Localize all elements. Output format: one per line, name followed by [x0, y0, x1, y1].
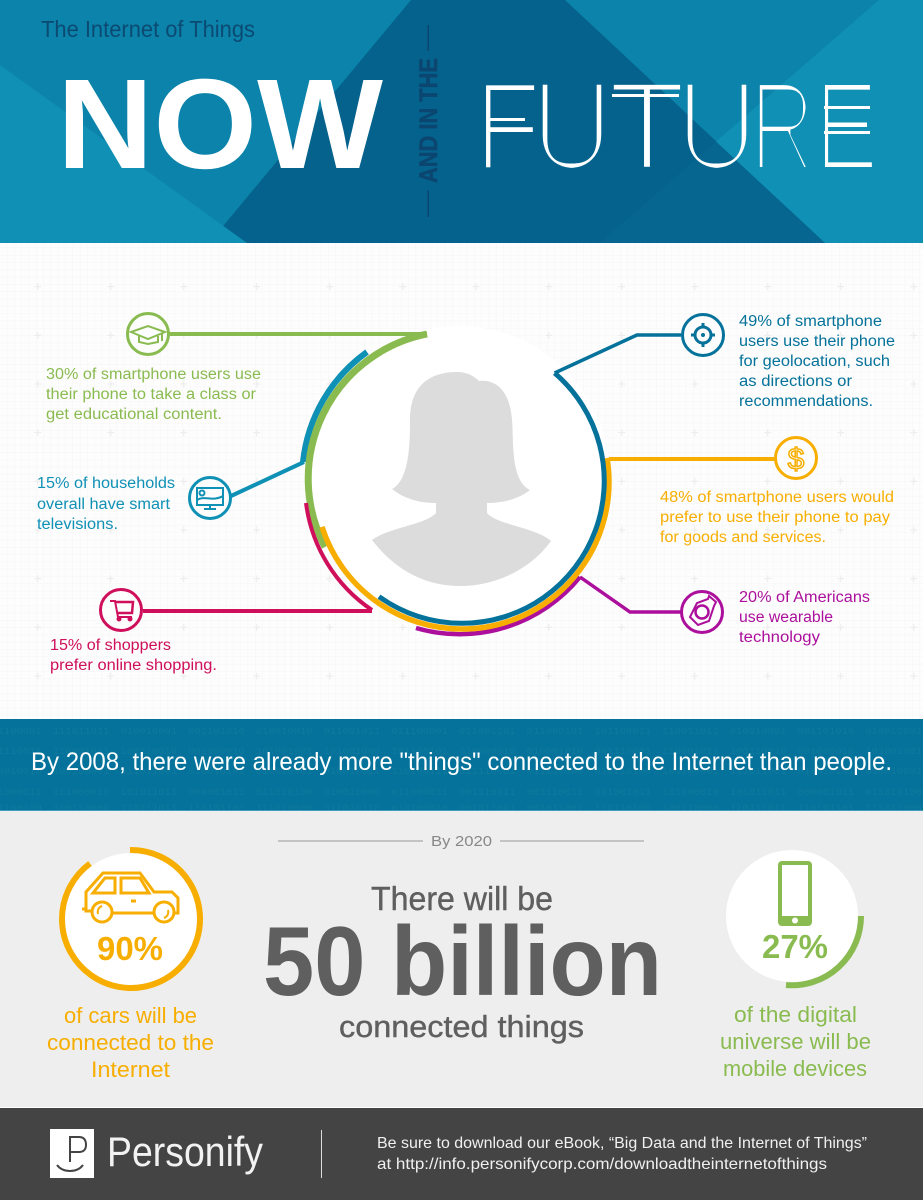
- binary pattern: 111110011 110001011 100110010 001000010 101001001 101001000 101100101 010000010 010001010 001110001 110001011 100110010 001000010 101001001: [0, 746, 922, 758]
- text: mobile devices: [720, 1002, 871, 1081]
- headline: 50 billion: [263, 880, 662, 1044]
- icon: phone: [778, 861, 812, 926]
- text: mobile devices: of the digital: [734, 1002, 857, 1027]
- text: smart television stat: [37, 475, 175, 533]
- text: cars: connected to the: [47, 1030, 214, 1055]
- headline: 50 billion: 50 billion: [263, 906, 662, 1016]
- call to action: [377, 1135, 867, 1173]
- text: geolocation stat: [739, 313, 895, 410]
- text: geolocation stat: as directions or: [739, 373, 852, 390]
- text: cars: [47, 1003, 214, 1082]
- heading: FUTURE: U: [531, 56, 613, 197]
- text: wearable stat: use wearable: [739, 609, 833, 626]
- text: geolocation stat: for geolocation, such: [739, 353, 890, 370]
- icon: graduation cap: [128, 314, 168, 354]
- panel: header: [0, 0, 923, 243]
- panel: 2008 banner: [0, 719, 923, 815]
- text: smart television stat: overall have smart: [37, 496, 171, 513]
- value: 27 percent: 27%: [762, 928, 828, 965]
- text: payments stat: [660, 489, 894, 546]
- text: online shopping stat: prefer online shopping.: [50, 657, 217, 674]
- binary pattern: 100010010 100100001 111011001 010010101 010010001 010010011 110100111 011110001 011110000 010110100 100100001 111011001 010010101 010010001: [0, 766, 922, 778]
- arc: payments: [322, 458, 775, 629]
- icon: dollar coin: $: [788, 443, 805, 476]
- text: geolocation stat: 49% of smartphone: [739, 313, 882, 330]
- binary pattern: 101000011 101000010 101011011 000001011 011010100 010010000 011000011 001110011 001110011 001001011 101000010 101011011 000001011 011010100: [0, 787, 922, 799]
- panel: footer: [0, 1108, 923, 1200]
- chart: 27 percent ring: [726, 850, 861, 985]
- icon: dollar coin: [776, 438, 816, 478]
- logo mark: [50, 1129, 94, 1178]
- text: cars: Internet: [91, 1057, 170, 1082]
- person in circle: [309, 326, 609, 626]
- text: smart television stat: 15% of households: [37, 475, 175, 492]
- binary pattern: 011100100 100110000 110111011 110101101 111010000 011010110 010100010 001011001 001011001 110110100 100110000 110111011 110101101 111011000: [0, 803, 922, 815]
- text: wearable stat: [739, 589, 870, 646]
- heading: and in the: AND IN THE: [415, 58, 443, 183]
- text: payments stat: prefer to use their phone to pay: [660, 509, 890, 526]
- heading: FUTURE: R: [749, 56, 815, 197]
- text: geolocation stat: users use their phone: [739, 333, 895, 350]
- headline: 50 billion: There will be: [371, 880, 553, 917]
- heading: FUTURE: F: [474, 56, 542, 197]
- heading: FUTURE: E: [814, 56, 879, 197]
- banner text: By 2008, there were already more "things" connected to the Internet than people.: [31, 748, 892, 776]
- binary pattern: 011100001 111011011 010010001 001101010 010010010 011001011 011100001 011001101 011000101 101100011 110011011 010010001 001101010 010011001: [0, 726, 922, 738]
- text: online shopping stat: 15% of shoppers: [50, 637, 171, 654]
- headline: 50 billion: connected things: [339, 1009, 584, 1044]
- text: education stat: [46, 366, 261, 423]
- text: cars: of cars will be: [64, 1003, 197, 1028]
- label: by 2020: By 2020: [431, 833, 492, 850]
- text: smart television stat: televisions.: [37, 516, 118, 533]
- text: payments stat: for goods and services.: [660, 529, 826, 546]
- value: 90 percent: 90%: [97, 930, 163, 967]
- icon: television: [190, 478, 230, 518]
- icon: shopping cart: [100, 590, 142, 630]
- binary pattern: [0, 726, 922, 815]
- text: wearable stat: technology: [739, 629, 820, 646]
- icon: smart watch: [682, 592, 722, 632]
- call to action: Be sure to download our eBook, “Big Data and the Internet of Things”: [377, 1135, 867, 1152]
- text: payments stat: 48% of smartphone users would: [660, 489, 894, 506]
- logo wordmark: Personify: [107, 1128, 263, 1175]
- text: wearable stat: 20% of Americans: [739, 589, 870, 606]
- icon: car: [82, 873, 178, 922]
- arc: online shopping: [143, 503, 372, 611]
- arc: education: [169, 334, 427, 547]
- text: mobile devices: mobile devices: [723, 1056, 867, 1081]
- text: education stat: get educational content.: [46, 406, 222, 423]
- icon: location target: [682, 314, 724, 356]
- text: online shopping stat: [50, 637, 217, 674]
- arc: geolocation: [379, 335, 681, 623]
- subtitle: The Internet of Things: [41, 16, 255, 42]
- arc: smart television: [231, 352, 367, 496]
- text: geolocation stat: recommendations.: [739, 393, 873, 410]
- text: education stat: 30% of smartphone users use: [46, 366, 261, 383]
- text: mobile devices: universe will be: [720, 1029, 871, 1054]
- panel: smartphone and device usage: [0, 243, 923, 719]
- call to action: at http://info.personifycorp.com/downloadtheinternetofthings: [377, 1156, 827, 1173]
- arc: wearable technology: [416, 577, 681, 634]
- text: education stat: their phone to take a class or: [46, 386, 256, 403]
- heading: FUTURE: U: [676, 56, 758, 197]
- heading: FUTURE: [474, 56, 879, 197]
- heading: FUTURE: T: [608, 56, 686, 197]
- panel: 2020 predictions: [0, 811, 923, 1107]
- heading: NOW: NOW: [57, 53, 383, 196]
- chart: 90 percent ring: [62, 850, 200, 988]
